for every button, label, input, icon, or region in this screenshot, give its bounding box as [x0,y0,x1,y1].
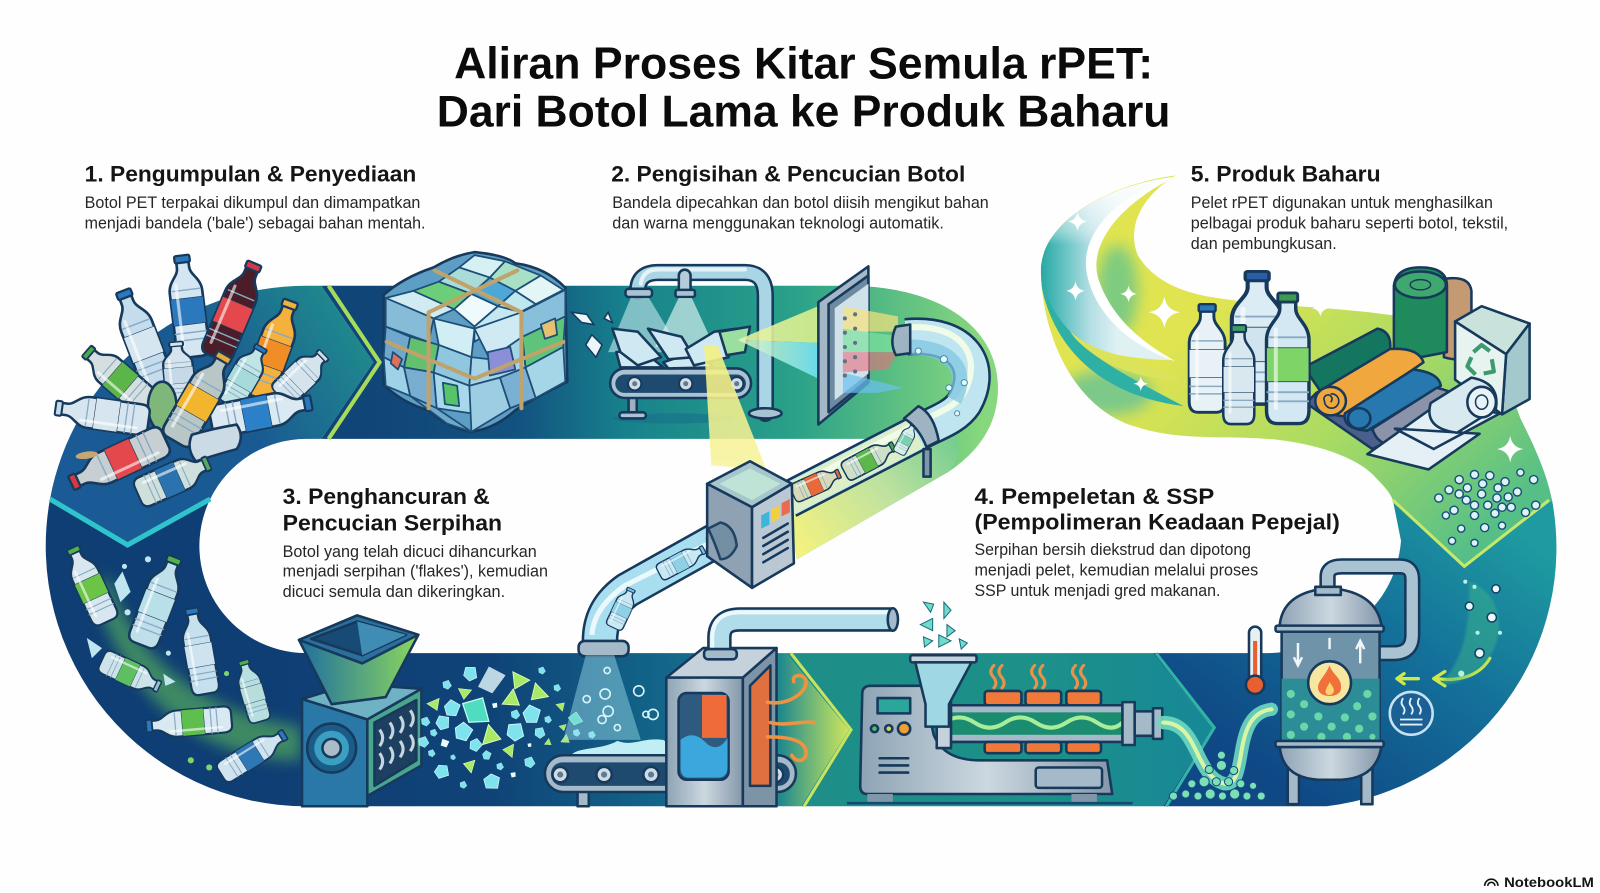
band: bottom run right [1153,500,1556,806]
icon: thermometer [1246,627,1264,694]
swoosh: pale crescent [1041,177,1177,360]
text block: step 3: menjadi serpihan ('flakes'), kemudian [283,563,548,581]
text block: step 4: Serpihan bersih diekstrud dan dipotong [974,541,1251,559]
folded stack base [1306,393,1423,449]
illustration: plastic bale [384,252,567,432]
illustration: plastic flakes [419,663,596,793]
process band [46,168,1561,806]
wash pipe [638,269,765,413]
band: diagonal fade [786,420,958,559]
recycle mark [1467,345,1494,375]
illustration: upper transparent pipe [787,325,972,503]
water droplets [915,348,967,416]
illustration: pile of used bottles [53,254,334,509]
flying shards between bale and wash [571,312,612,357]
illustration: melt stream and pellets [1163,709,1271,800]
heaters [985,691,1101,753]
text block: step 4: 4. Pempeletan & SSP [974,484,1214,509]
illustration: sorting box [707,461,794,588]
chevron edges [50,286,1549,806]
text block: step 5: Pelet rPET digunakan untuk menghasilkan [1191,194,1493,212]
chevron tip glow [778,653,849,806]
illustration: falling bottles with green swoosh [60,542,301,784]
title: Dari Botol Lama ke Produk Baharu [437,86,1170,137]
text block: step 1: 1. Pengumpulan & Penyediaan [85,162,416,187]
text block: step 5: 5. Produk Baharu [1191,162,1381,187]
steam [991,665,1086,688]
film roll [1367,378,1500,469]
band: step 1 to 3 left curve [50,286,373,545]
arrows into reactor [1397,658,1490,686]
swoosh: white streak [1086,177,1177,361]
stray strip [75,450,98,460]
illustration: lower transparent pipe [579,531,722,656]
pellets falling stream [1441,580,1502,684]
illustration: bottom conveyor with spray [545,655,796,806]
hot air lines [767,676,814,760]
text block: step 4: SSP untuk menjadi gred makanan. [974,582,1220,600]
band: top run with loop [321,286,998,559]
band: bottom run middle [786,653,1212,806]
reactor pellets [1287,690,1377,741]
hopper funnel [910,655,977,662]
illustration: optical scanner panel [818,266,903,425]
text block: step 3: Pencucian Serpihan [283,511,502,536]
illustration: dryer [666,648,814,806]
extruder end caps [1122,702,1135,745]
foam [566,739,679,760]
box collar [708,523,737,559]
barrel [944,705,1122,742]
text block: step 1: Botol PET terpakai dikumpul dan dimampatkan [85,194,420,212]
text block: step 1 [85,162,426,233]
title: Aliran Proses Kitar Semula rPET: [454,38,1153,89]
crushed bottles on belt [612,327,750,368]
band: bottom run left [46,499,849,806]
text block: step 5 [1191,162,1508,253]
band: step 5 swoosh [1031,168,1561,577]
flange [579,641,629,656]
text block: step 1: menjadi bandela ('bale') sebagai bahan mentah. [85,215,426,233]
pipe flanges [892,325,939,477]
dryer side heater [750,665,770,786]
sparkle stars [1066,212,1524,463]
hopper [299,615,418,704]
illustration: shredder [299,615,421,806]
text block: step 3: Botol yang telah dicuci dihancurkan [283,543,537,561]
illustration: new products [1189,267,1530,469]
process arrows [1294,638,1364,665]
illustration: extruder [847,655,1162,803]
bag [1455,306,1530,414]
shredder blades [380,710,413,770]
fabric rolls [1304,329,1461,447]
illustration: return pipe with flakes [704,602,967,659]
new bottles [1232,271,1282,404]
base cabinet [1036,767,1102,788]
text block: step 2 [611,162,989,233]
logo: NotebookLM: NotebookLM [1504,875,1594,891]
reactor pipe [1328,566,1412,653]
text block: step 3: 3. Penghancuran & [283,484,490,509]
conveyor [578,788,589,806]
flame [1308,661,1351,704]
bubbles [583,667,658,731]
water sprays [608,298,682,352]
swoosh: top fade [1048,176,1174,243]
loose debris [87,556,176,686]
green crushed bottle [148,382,177,431]
conveyor [612,413,735,424]
text block: step 2: Bandela dipecahkan dan botol diisih mengikut bahan [612,194,989,212]
text block: step 4 [974,484,1340,600]
illustration: SSP reactor [1276,566,1412,804]
text block: step 4: menjadi pelet, kemudian melalui proses [974,562,1258,580]
bottles in pipe [789,464,844,503]
bale straps [387,270,563,408]
text block: step 5: pelbagai produk baharu seperti botol, tekstil, [1191,215,1508,233]
crushed small bottle [190,425,241,461]
legs [1288,760,1299,804]
text block: step 3: dicuci semula dan dikeringkan. [283,583,505,601]
illustration: sorting beams [704,306,818,469]
text block: step 4: (Pempolimeran Keadaan Pepejal) [974,510,1340,535]
text block: step 2: 2. Pengisihan & Pencucian Botol [611,162,965,187]
title [437,38,1170,137]
text block: step 3 [283,484,548,601]
text block: step 5: dan pembungkusan. [1191,235,1337,253]
illustration: washing conveyor [608,269,782,424]
swoosh: green glow [1097,245,1138,337]
swoosh: yellow streak [1070,332,1168,378]
icon: heat circle [1390,692,1433,735]
text block: step 2: dan warna menggunakan teknologi automatik. [612,215,944,233]
swoosh: teal streak [1040,238,1184,406]
illustration: pellet cluster [1435,469,1540,547]
fabric rolls tall [1394,267,1471,362]
